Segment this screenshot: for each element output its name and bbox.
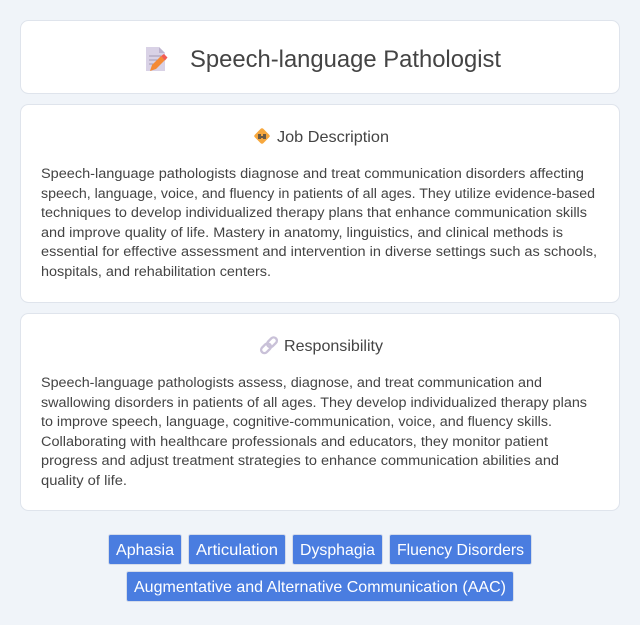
icon: link	[260, 336, 278, 354]
responsibility text: progress and adjust treatment strategies to enhance communication abilities and	[41, 453, 559, 469]
responsibility text	[41, 375, 587, 489]
title text: Speech-language Pathologist	[190, 46, 501, 73]
icon: diamond sign	[254, 128, 270, 144]
tag: dysphagia: Dysphagia	[300, 542, 375, 559]
tag: fluency disorders	[390, 534, 532, 564]
job description text: speech, language, voice, and fluency in patients of all ages. They utilize evidence-based	[41, 186, 595, 202]
job description text: Speech-language pathologists diagnose and treat communication disorders affecting	[41, 166, 584, 182]
tag: aphasia: Aphasia	[116, 542, 174, 559]
tag: AAC: Augmentative and Alternative Communication (AAC)	[134, 579, 506, 596]
responsibility text: quality of life.	[41, 473, 127, 489]
heading: responsibility: Responsibility	[284, 338, 383, 355]
job description text: techniques to develop individualized therapy plans that enhance communication skills	[41, 205, 587, 221]
tag: fluency disorders: Fluency Disorders	[397, 542, 524, 559]
tag: aphasia	[108, 534, 182, 564]
tag: articulation	[188, 534, 286, 564]
tags	[108, 534, 532, 602]
job description text: and improve quality of life. Mastery in anatomy, linguistics, and clinical methods is	[41, 225, 563, 241]
tag: articulation: Articulation	[196, 542, 278, 559]
job description text: essential for effective assessment and intervention in diverse settings such as schools,	[41, 244, 597, 260]
tag: AAC	[126, 572, 514, 602]
panel: responsibility	[20, 314, 620, 510]
responsibility text: swallowing disorders in patients of all ages. They develop individualized therapy plans	[41, 395, 587, 411]
job description text	[41, 166, 597, 280]
responsibility text: to improve speech, language, cognitive-communication, voice, and fluency skills.	[41, 414, 552, 430]
icon: document with pencil	[146, 47, 168, 71]
responsibility text: Collaborating with healthcare professionals and educators, they monitor patient	[41, 434, 548, 450]
tag: dysphagia	[292, 534, 382, 564]
heading: job description: Job Description	[277, 129, 389, 146]
panel: job description	[20, 104, 620, 302]
panel: title	[20, 20, 620, 94]
job description text: hospitals, and rehabilitation centers.	[41, 264, 271, 280]
responsibility text: Speech-language pathologists assess, diagnose, and treat communication and	[41, 375, 542, 391]
